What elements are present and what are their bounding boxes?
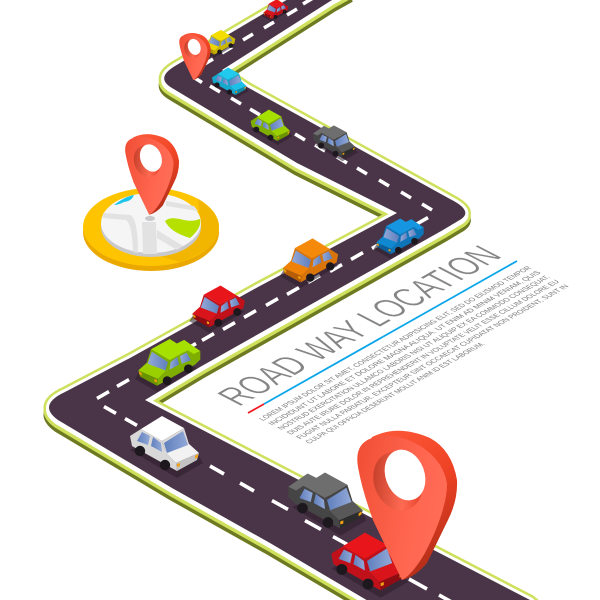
lorem ipsum paragraph — [258, 265, 571, 445]
car: red middle — [189, 285, 245, 333]
car: yellow — [202, 30, 235, 58]
medium location pin — [125, 134, 179, 215]
lorem ipsum paragraph: INCIDIDUNT UT LABORE ET DOLORE MAGNA ALIQUA. UT ENIM AD MINIM VENIAM, QUIS — [267, 270, 544, 427]
title: ROAD WAY LOCATION — [208, 241, 512, 411]
car: dark grey far — [313, 125, 358, 161]
car: orange — [280, 238, 338, 288]
car: white — [130, 416, 203, 478]
lorem ipsum paragraph: CULPA QUI OFFICIA DESERUNT MOLLIT ANIM ID EST LABORUM. — [304, 341, 487, 445]
lorem ipsum paragraph: DUIS AUTE IRURE DOLOR IN REPREHENDERIT IN VOLUPTATE VELIT ESSE CILLUM DOLORE EU — [286, 279, 562, 436]
car: lime — [251, 110, 292, 145]
car: red far top — [262, 0, 288, 22]
lane dashes — [97, 0, 457, 600]
car: blue pickup — [374, 218, 424, 259]
lorem ipsum paragraph: FUGIAT NULLA PARIATUR. EXCEPTEUR SINT OCCAECAT CUPIDATAT NON PROIDENT, SUNT IN — [295, 284, 571, 440]
car: green pickup — [135, 339, 200, 392]
large location pin — [357, 431, 457, 580]
car: black pickup — [288, 472, 367, 536]
map platform with pin — [83, 134, 219, 271]
lorem ipsum paragraph: NOSTRUD EXERCITATION ULLAMCO LABORIS NISI UT ALIQUIP EX EA COMMODO CONSEQUAT. — [276, 275, 553, 431]
car: red near — [331, 533, 408, 598]
platform yellow disc — [83, 188, 219, 271]
title underline — [248, 261, 517, 413]
map disc — [101, 193, 201, 257]
car: cyan — [212, 68, 248, 98]
small location pin — [179, 33, 211, 80]
lorem ipsum paragraph: LOREM IPSUM DOLOR SIT AMET, CONSECTETUR ADIPISICING ELIT, SED DO EIUSMOD TEMPOR — [258, 265, 534, 422]
